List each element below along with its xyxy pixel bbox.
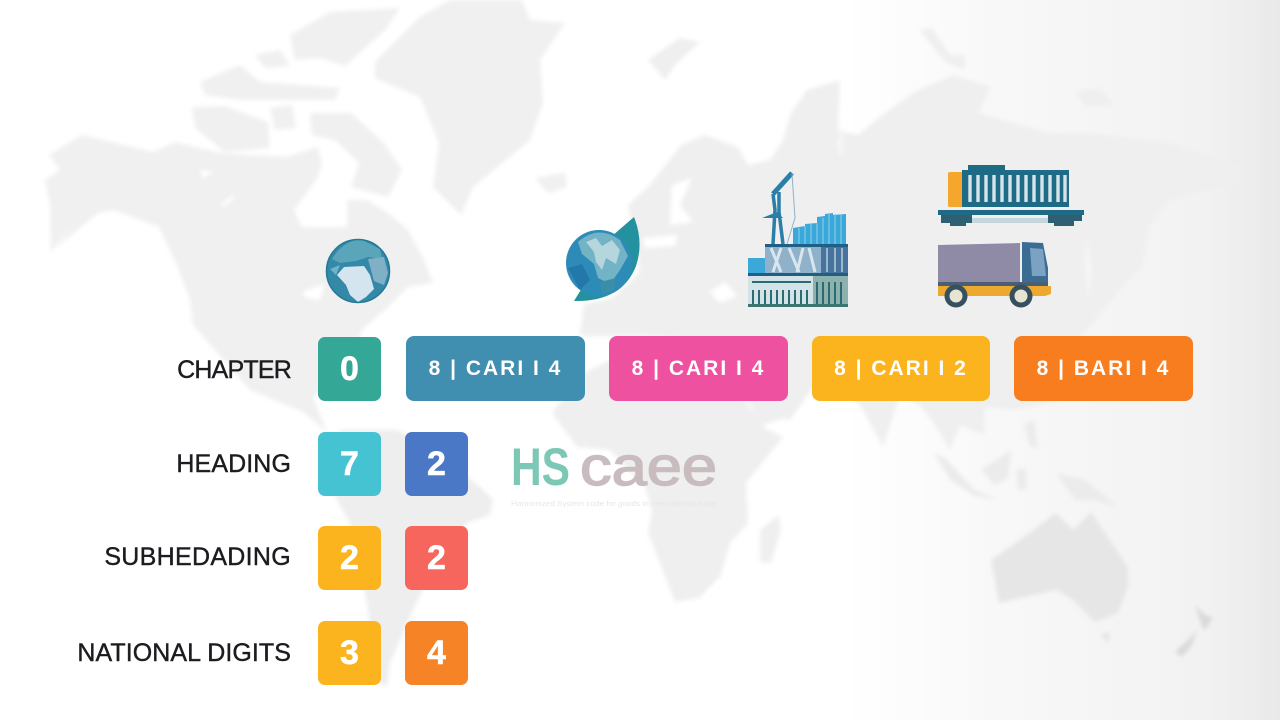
label: national digits: NATIONAL DIGITS bbox=[77, 639, 291, 667]
digit box: 7: 7 bbox=[340, 445, 359, 483]
digit box: 2 red bbox=[405, 526, 468, 590]
digit box: 4 bbox=[405, 621, 468, 685]
logo: HS code with tagline bbox=[511, 440, 717, 508]
digit box: 0: 0 bbox=[340, 350, 359, 388]
bar: yellow bbox=[812, 336, 990, 401]
bar: orange bbox=[1014, 336, 1193, 401]
label: subheading: SUBHEDADING bbox=[104, 543, 291, 571]
label: heading: HEADING bbox=[176, 450, 291, 478]
digit box: 3 bbox=[318, 621, 381, 685]
digit box: 3: 3 bbox=[340, 634, 359, 672]
bar: pink: 8 | CARI I 4 bbox=[632, 357, 765, 380]
bar: pink bbox=[609, 336, 788, 401]
digit box: 4: 4 bbox=[427, 634, 446, 672]
digit box: 0 bbox=[318, 337, 381, 401]
icon: shipping container on rail car bbox=[938, 165, 1084, 226]
icon: port crane and warehouse bbox=[748, 171, 848, 307]
bar: teal bbox=[406, 336, 585, 401]
digit box: 7 bbox=[318, 432, 381, 496]
digit box: 2 blue bbox=[405, 432, 468, 496]
icon: globe with leaf bbox=[566, 217, 640, 301]
digit box: 2 yellow: 2 bbox=[340, 539, 359, 577]
bar: yellow: 8 | CARI I 2 bbox=[834, 357, 968, 380]
logo: HS code with tagline: Harmonized System code for goods in international trade bbox=[511, 501, 716, 508]
digit box: 2 red: 2 bbox=[427, 539, 446, 577]
icon: delivery truck bbox=[938, 242, 1051, 308]
digit box: 2 yellow bbox=[318, 526, 381, 590]
digit box: 2 blue: 2 bbox=[427, 445, 446, 483]
icon: small globe bbox=[326, 238, 390, 304]
label: chapter: CHAPTER bbox=[177, 356, 291, 384]
bar: teal: 8 | CARI I 4 bbox=[429, 357, 562, 380]
bar: orange: 8 | BARI I 4 bbox=[1037, 357, 1170, 380]
